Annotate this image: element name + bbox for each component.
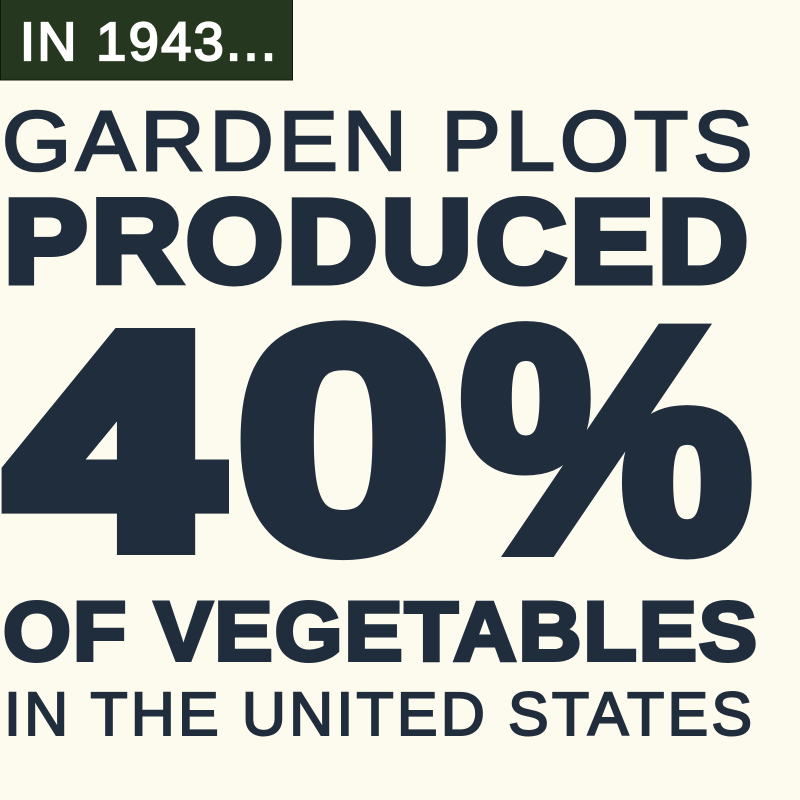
heading: garden plots: GARDEN PLOTS [2, 95, 752, 188]
badge: in 1943: IN 1943... [20, 12, 276, 72]
heading: of vegetables: OF VEGETABLES [3, 585, 757, 679]
statistic: 40% [11, 263, 752, 616]
badge: in 1943 [0, 0, 292, 80]
statistic: 40%: 4 [11, 276, 218, 606]
statistic: 40%: % [461, 263, 752, 616]
heading: in the united states: IN THE UNITED STATES [4, 680, 752, 748]
heading: produced: PRODUCED [4, 175, 748, 307]
statistic: 40%: 0 [235, 263, 452, 616]
